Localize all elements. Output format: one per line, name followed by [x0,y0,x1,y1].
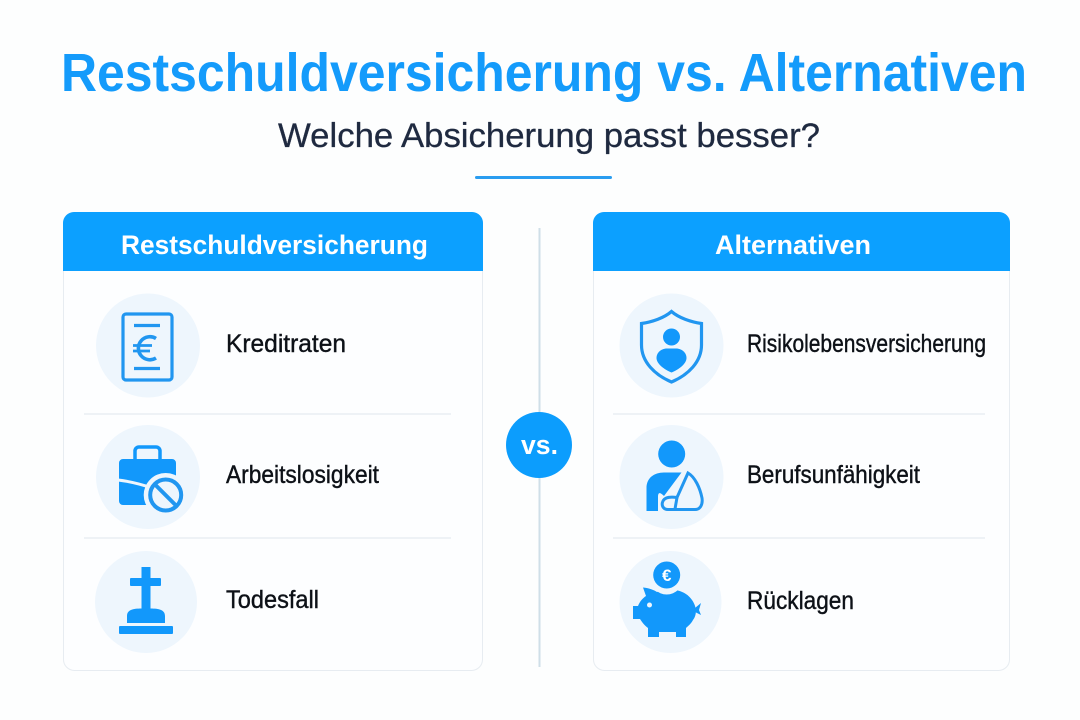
subtitle: Welche Absicherung passt besser? [278,117,820,155]
label: Arbeitslosigkeit: Arbeitslosigkeit [226,461,379,489]
icon: piggy bank with euro coin: € [662,566,672,585]
vs badge: vs. [521,430,558,460]
icon: grave with cross [119,567,173,634]
label: Rücklagen: Rücklagen [747,587,854,615]
label: Risikolebensversicherung: Risikolebensversicherung [747,330,986,358]
label: Berufsunfähigkeit: Berufsunfähigkeit [747,461,920,489]
icon: shield with person [642,312,702,382]
row: Arbeitslosigkeit [96,425,379,529]
row: Todesfall [95,551,319,653]
icon: piggy bank with euro coin [633,562,701,637]
icon: person with arm sling [646,440,702,511]
row: Kreditraten [96,294,346,398]
panel: Restschuldversicherung [63,212,483,670]
row: Rücklagen [620,551,854,653]
panel header: Restschuldversicherung [63,212,483,271]
row: Risikolebensversicherung [620,294,986,398]
label: Kreditraten: Kreditraten [226,330,346,358]
vs badge [506,412,572,478]
row: Berufsunfähigkeit [620,425,920,529]
title: Restschuldversicherung vs. Alternativen [61,43,1027,103]
panel: Alternativen [593,212,1010,670]
center divider line [538,228,540,667]
icon: euro document [123,314,172,380]
panel header: Alternativen [593,212,1010,271]
panel header: Alternativen: Alternativen [715,230,871,260]
panel header: Restschuldversicherung: Restschuldversicherung [121,230,428,260]
icon: briefcase with ban sign [118,447,188,517]
label: Todesfall: Todesfall [226,586,319,614]
